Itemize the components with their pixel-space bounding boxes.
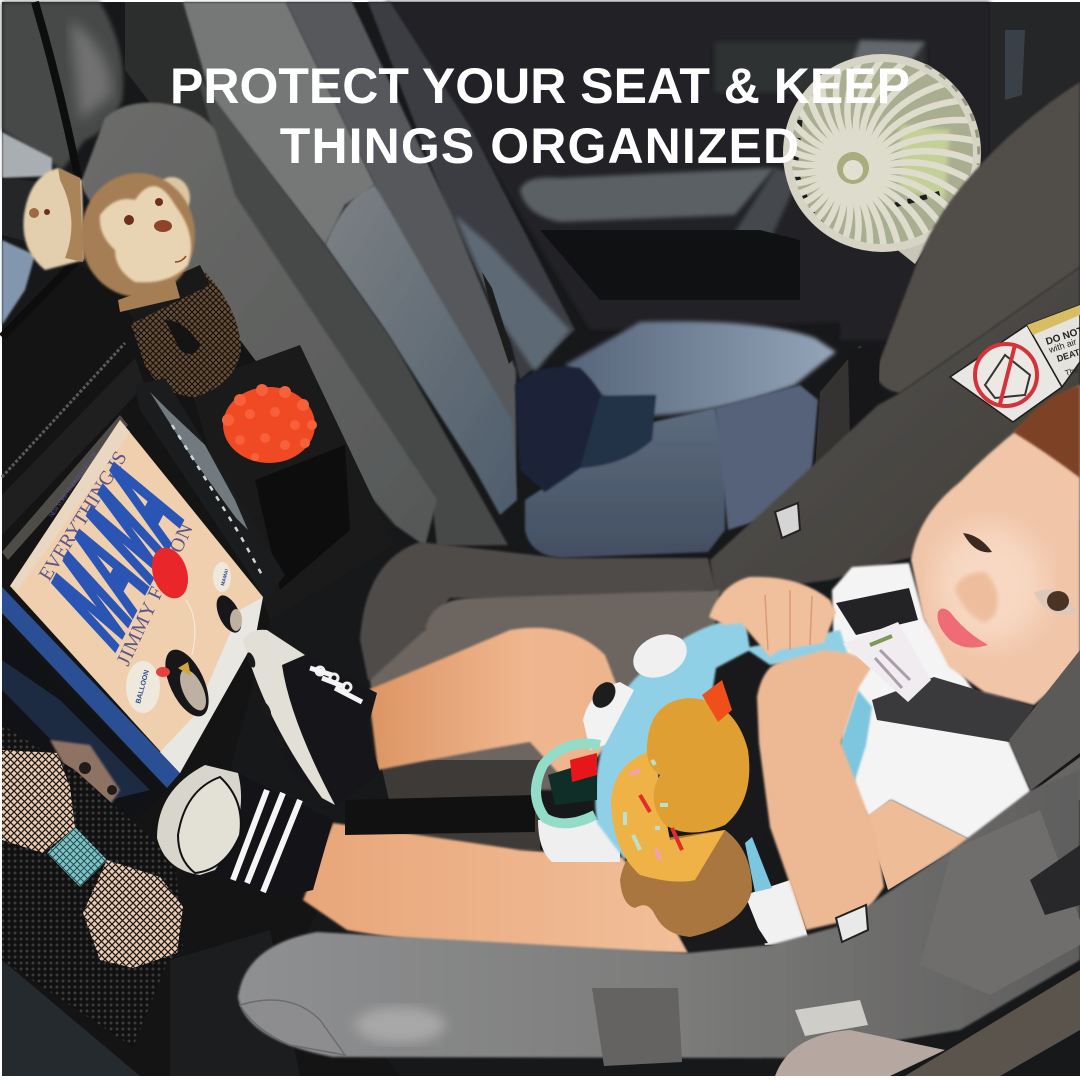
rear side panels of the car seats (125, 2, 575, 546)
car seat side bolster (960, 650, 1080, 850)
book: Everything is Mama: MAMA (35, 434, 200, 672)
near leg (303, 823, 688, 953)
plush teether toy (536, 617, 872, 892)
book: Everything is Mama: EVERYTHING IS (35, 447, 132, 585)
car seat front base (238, 770, 1080, 1076)
title: PROTECT YOUR SEAT & KEEP (170, 58, 910, 114)
navy cap (515, 367, 656, 492)
seat tags (775, 503, 868, 942)
toy eyes (626, 626, 694, 686)
glossy pocket and card under book (2, 620, 167, 835)
baby arm and fist (757, 650, 884, 930)
far sneaker (243, 630, 380, 807)
lips (938, 608, 988, 648)
baby head (911, 385, 1080, 705)
rear headrest and window (2, 2, 123, 325)
clear book pocket (2, 378, 285, 600)
baby hand holding toy (709, 577, 836, 657)
monkey plush (23, 168, 195, 312)
book: Everything is Mama: JIMMY FALLON (113, 520, 198, 669)
mirror strap (2, 2, 82, 337)
near sneaker (157, 765, 333, 895)
baby onesie (538, 563, 1031, 945)
red spiky ball (222, 384, 317, 463)
fan (783, 54, 981, 264)
eyes (963, 533, 992, 552)
warning sticker: The (1064, 365, 1080, 378)
toy tag (843, 622, 931, 702)
book: Everything is Mama: MAMA! (220, 568, 230, 587)
warning sticker: with air (1047, 337, 1078, 355)
book: Everything is Mama: NEW YORK TIMES BESTSELLER (48, 451, 99, 519)
mint ring (536, 744, 600, 823)
balloon (146, 543, 194, 603)
book: Everything is Mama: BALLOON (135, 669, 151, 705)
organizer: black seat protector (2, 263, 400, 1076)
title: THINGS ORGANIZED (280, 118, 800, 174)
far leg (368, 628, 630, 775)
speech bubbles (126, 661, 160, 713)
warning sticker (950, 305, 1080, 422)
mesh pocket at strap (120, 265, 241, 397)
front seat back face (80, 103, 437, 546)
penguins (156, 643, 218, 723)
title (170, 58, 910, 174)
book: Everything is Mama (2, 420, 263, 788)
harness straps (681, 588, 1034, 953)
cookie teethers (611, 680, 752, 937)
car seat buckle strap (345, 795, 535, 835)
baby upper arm (866, 800, 970, 890)
front seat cushion (525, 321, 836, 558)
nose (955, 572, 997, 623)
hair (1013, 385, 1080, 478)
mesh pocket with toy (2, 725, 183, 1047)
car seat headrest and shell (360, 82, 1080, 850)
seat belt buckle by seat (482, 272, 514, 364)
